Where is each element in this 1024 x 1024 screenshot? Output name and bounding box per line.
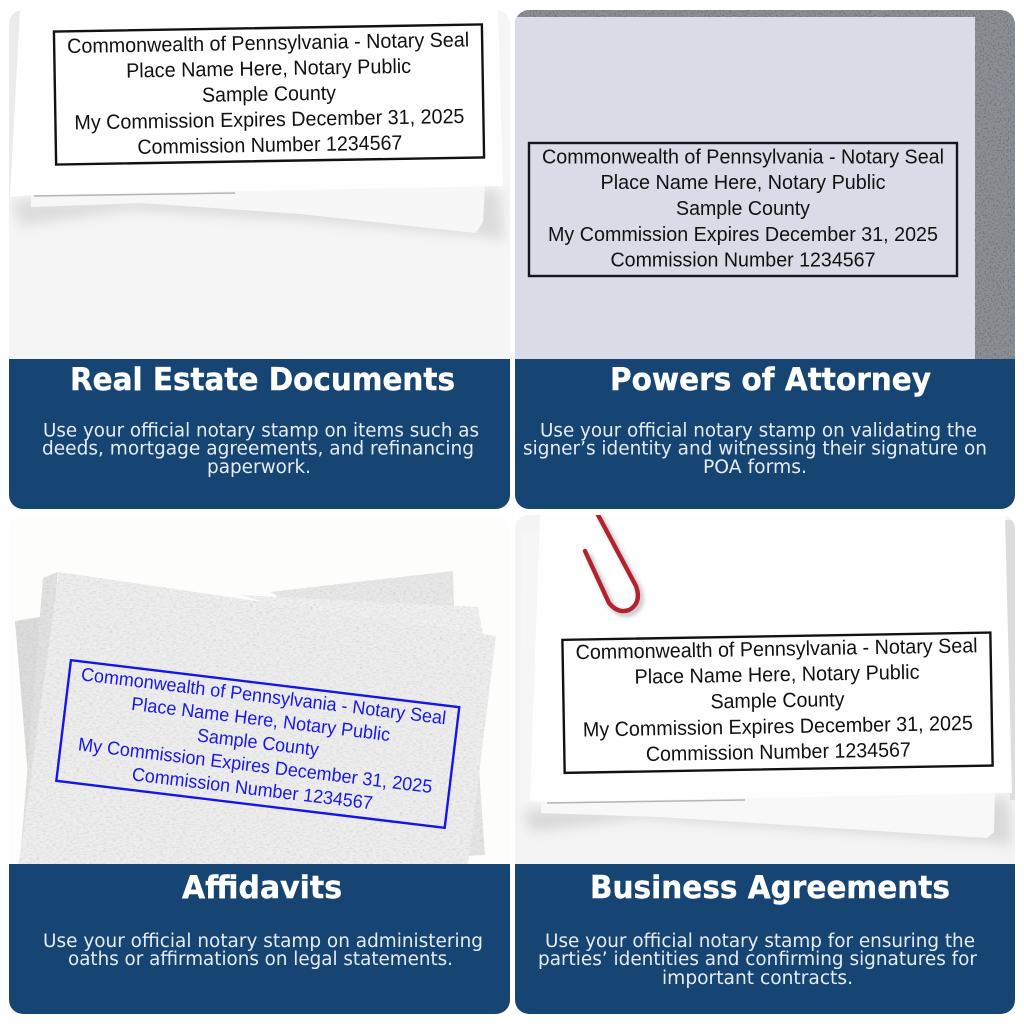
stamp: Pennsylvania notary seal blue: Place Name Here, Notary Public [130,693,391,745]
description: deeds, mortgage agreements, and refinancing [42,438,474,460]
stamp: Pennsylvania notary seal black: My Commission Expires December 31, 2025 [583,712,973,742]
description: Use your official notary stamp on administering [43,931,483,952]
photo: stacked white papers with black stamp [9,10,510,359]
stamp: Pennsylvania notary seal blue: Sample County [196,724,321,760]
stamp: Pennsylvania notary seal black: Commonwealth of Pennsylvania - Notary Seal [67,28,469,58]
description: paperwork. [207,457,311,478]
stamp: Pennsylvania notary seal black: Place Name Here, Notary Public [600,171,886,194]
banner: business agreements [515,864,1015,1014]
description: POA forms. [703,457,807,478]
icon: red paperclip [585,513,641,614]
heading: Real Estate Documents [70,362,455,398]
stamp: Pennsylvania notary seal black: Commission Number 1234567 [610,248,876,272]
photo: white papers with red paperclip and black stamp [515,513,1015,864]
description [523,420,987,478]
banner: affidavits [9,864,510,1014]
description: Use your official notary stamp for ensuring the [545,931,975,952]
heading: Powers of Attorney [610,362,931,398]
description: signer’s identity and witnessing their signature on [523,438,987,460]
description: parties’ identities and confirming signatures for [538,949,977,970]
stamp: Pennsylvania notary seal black: Place Name Here, Notary Public [126,55,411,83]
stamp: Pennsylvania notary seal black [54,24,484,165]
panel: real estate documents [9,10,510,509]
description [42,420,479,478]
stamp: Pennsylvania notary seal black [529,143,957,276]
stamp: Pennsylvania notary seal black: Place Name Here, Notary Public [634,661,920,689]
stamp: Pennsylvania notary seal black: Sample County [676,197,811,220]
stamp: Pennsylvania notary seal blue: My Commission Expires December 31, 2025 [77,733,433,797]
stamp: Pennsylvania notary seal black: Commonwealth of Pennsylvania - Notary Seal [542,146,944,168]
panel: powers of attorney [515,10,1015,509]
stamp: Pennsylvania notary seal blue: Commission Number 1234567 [131,763,374,813]
stamp: Pennsylvania notary seal black: My Commission Expires December 31, 2025 [548,223,938,246]
photo: textured paper stack with blue stamp [15,571,496,864]
stamp: Pennsylvania notary seal blue [56,660,459,828]
stamp: Pennsylvania notary seal black: Commonwealth of Pennsylvania - Notary Seal [575,634,978,664]
stamp: Pennsylvania notary seal black: My Commission Expires December 31, 2025 [74,105,465,134]
description: Use your official notary stamp on validating the [540,420,977,442]
description: oaths or affirmations on legal statements. [68,949,453,970]
banner: powers of attorney [515,359,1015,509]
banner: real estate documents [9,359,510,509]
description [538,931,977,989]
stamp: Pennsylvania notary seal black: Sample County [710,688,845,713]
panel: affidavits [9,571,510,1014]
description [43,931,483,970]
stamp: Pennsylvania notary seal black: Commission Number 1234567 [137,131,403,159]
description: important contracts. [662,968,853,989]
stamp: Pennsylvania notary seal black: Sample County [202,82,337,107]
stamp: Pennsylvania notary seal black [562,633,993,773]
stamp: Pennsylvania notary seal blue: Commonwealth of Pennsylvania - Notary Seal [80,663,447,728]
photo: grey paper on concrete with black stamp [515,10,1015,359]
heading: Business Agreements [590,870,950,906]
description: Use your official notary stamp on items such as [43,420,479,442]
panel: business agreements [515,513,1015,1014]
stamp: Pennsylvania notary seal black: Commission Number 1234567 [646,738,911,766]
heading: Affidavits [182,870,342,906]
